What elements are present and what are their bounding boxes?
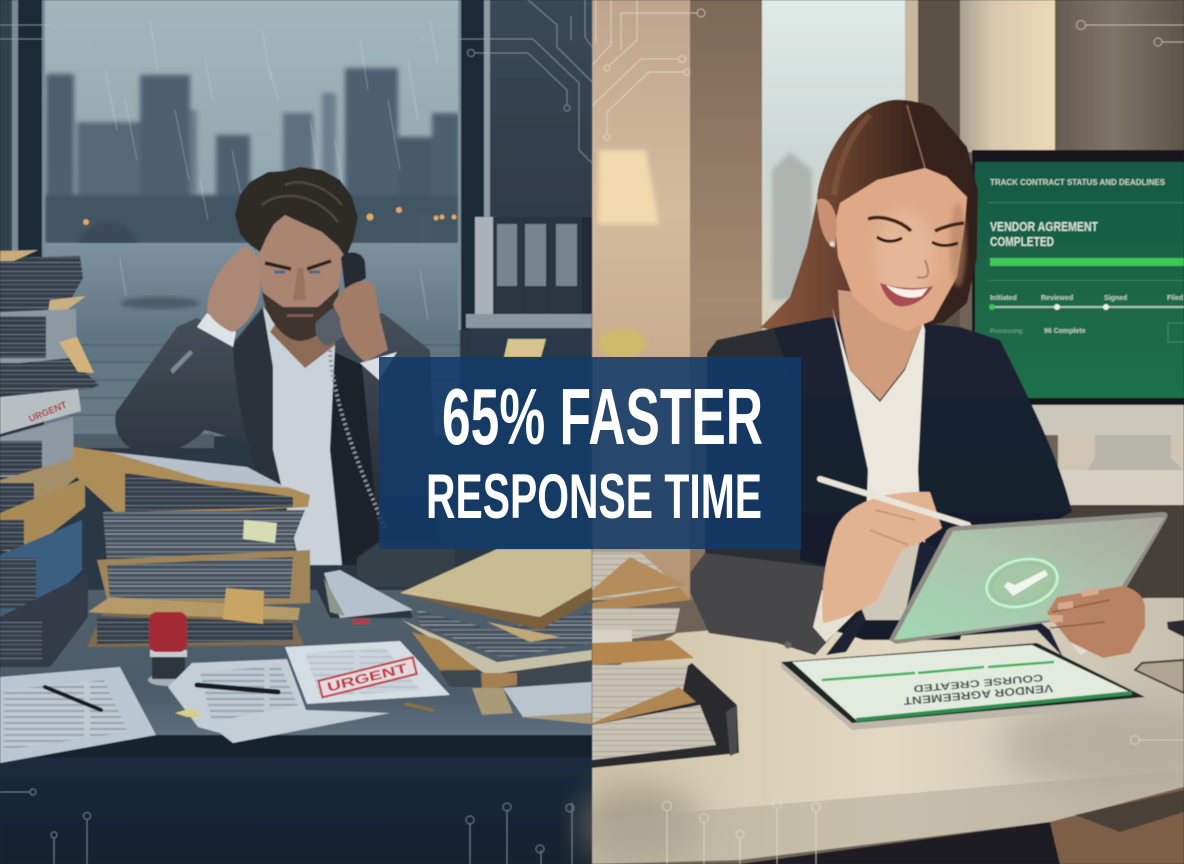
nose — [917, 260, 928, 278]
sticky notes — [243, 520, 277, 543]
left paper stacks and binders — [0, 250, 99, 667]
headline: 65% faster: 65% FASTER — [442, 372, 763, 461]
panel: calm office, right half — [580, 0, 1184, 864]
headline banner — [379, 357, 801, 549]
hand on phone — [333, 281, 388, 362]
head — [235, 167, 358, 368]
city lights — [83, 207, 456, 225]
shirt — [832, 307, 925, 620]
check badge — [979, 550, 1065, 616]
monitor with contract tracker — [972, 150, 1184, 505]
face — [835, 168, 967, 331]
monitor with contract tracker: Signed — [1104, 295, 1127, 302]
papers on desk — [0, 641, 450, 763]
nose shadow — [293, 268, 306, 300]
monitor with contract tracker: VENDOR AGREMENT — [990, 219, 1098, 234]
desk — [0, 590, 592, 864]
papers and binder under phone — [317, 565, 413, 624]
brows, eyes — [868, 218, 911, 231]
brick wall — [490, 0, 592, 217]
tablet on desk: COURSE CREATED — [913, 671, 1043, 694]
monitor with contract tracker: TRACK CONTRACT STATUS AND DEADLINES — [990, 178, 1166, 187]
tablet on desk: VENDOR AGREEMENT — [903, 681, 1053, 707]
smile — [880, 283, 933, 306]
phone on desk — [1167, 620, 1184, 637]
beard — [262, 288, 339, 341]
binders on shelf — [466, 217, 592, 448]
phone cord — [330, 350, 385, 528]
monitor with contract tracker: Filed — [1167, 295, 1183, 302]
raised hand at head — [207, 246, 260, 332]
hair — [235, 167, 358, 258]
panel: stressed office, left half — [0, 0, 592, 864]
monitor with contract tracker: COMPLETED — [990, 234, 1054, 249]
hand holding tablet — [1047, 586, 1145, 658]
monitor with contract tracker: Reviewed — [1041, 295, 1073, 302]
center paper stack with folders — [72, 447, 310, 647]
right paper stack with folders — [400, 549, 592, 724]
jacket body — [760, 317, 1072, 640]
writing hand — [822, 492, 942, 623]
window ledge — [44, 434, 214, 448]
circuit lines, bright side — [592, 0, 1184, 864]
torso and sleeve — [115, 306, 440, 565]
hair — [760, 100, 978, 335]
closed folio on desk — [1135, 660, 1184, 693]
woman in blazer — [690, 100, 1072, 657]
monitor with contract tracker: 96 Complete — [1044, 328, 1086, 335]
circuit lines, dark side — [0, 0, 592, 864]
dark furniture behind the desk — [1058, 505, 1184, 600]
binder and paper stack — [592, 552, 739, 768]
monitor with contract tracker: Initiated — [990, 295, 1017, 302]
brows and eyes — [265, 261, 331, 269]
tablet held up with check mark — [889, 512, 1168, 644]
man in suit on phone — [115, 167, 455, 587]
blazer upper arm — [690, 328, 856, 655]
lamp shade — [598, 150, 659, 224]
left paper stacks and binders: URGENT — [27, 400, 69, 425]
rain streaks — [60, 20, 438, 330]
phone base — [357, 543, 455, 587]
right jacket dark panel — [330, 350, 379, 565]
blazer sleeve — [690, 553, 833, 655]
shirt — [263, 306, 342, 565]
window with rainy city — [44, 0, 460, 436]
telephone handset — [315, 252, 366, 345]
ear and earring — [817, 199, 837, 248]
stylus — [820, 479, 968, 525]
pens and sticky scrap — [45, 685, 432, 717]
face shading — [875, 210, 935, 300]
window frame — [0, 0, 490, 330]
urgent stamp mark — [318, 657, 417, 697]
cuffs — [197, 313, 236, 347]
navy behind tablet — [900, 540, 1063, 657]
headline: response time: RESPONSE TIME — [426, 462, 762, 532]
sleeve buttons — [170, 350, 193, 374]
tablet on desk — [781, 643, 1145, 730]
sleeve buttons — [784, 642, 792, 648]
parting and sheen — [907, 105, 925, 168]
mouth — [287, 314, 313, 317]
bright window — [762, 0, 907, 340]
red stamp — [148, 612, 188, 686]
neck — [838, 290, 925, 400]
monitor with contract tracker: Processing: — [990, 328, 1024, 335]
urgent stamp mark: URGENT — [326, 660, 409, 695]
desk — [580, 598, 1184, 864]
cuff — [813, 590, 862, 642]
